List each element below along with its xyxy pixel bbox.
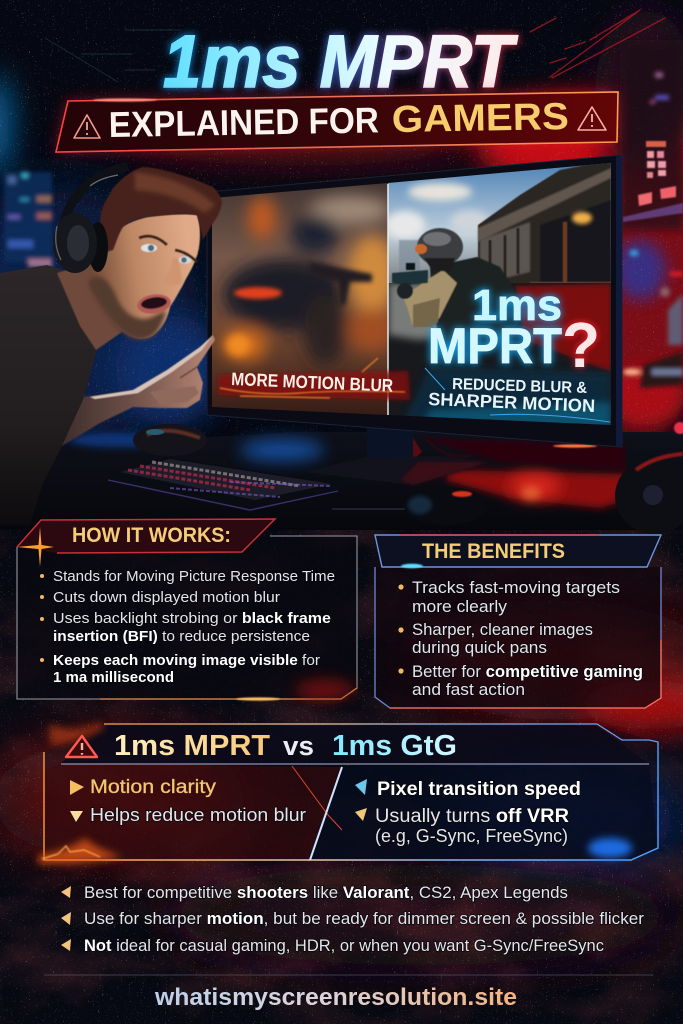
label: 1ms MPRT?: MPRT [428,318,562,374]
list: recommendations: Not ideal for casual gaming, HDR, or when you want G-Sync/FreeSync [84,936,604,955]
gamepad at right [615,422,683,534]
neck [57,262,122,350]
column: GtG: Usually turns off VRR [375,806,569,827]
list: how it works items: 1 ma millisecond [53,669,174,686]
list: benefits items: and fast action [412,680,525,699]
list: how it works items: Uses backlight strobing or black frame [53,610,331,627]
heading: 1ms MPRT vs 1ms GtG: vs [283,731,314,761]
mouth [136,292,172,316]
banner text: GAMERS [391,96,569,141]
banner text: EXPLAINED FOR [108,99,379,145]
divider [310,767,342,860]
screen left half: more motion blur [212,183,388,415]
list: recommendations: Best for competitive shooters like Valorant, CS2, Apex Legends [84,883,568,902]
icon: spark star [17,527,54,567]
mouse left [133,424,207,456]
column: GtG: (e.g, G-Sync, FreeSync) [375,826,568,846]
arm and hand [60,335,215,447]
soldier [392,228,518,345]
label: 1ms MPRT?: 1ms [472,281,562,330]
heading: the benefits: THE BENEFITS [422,540,565,563]
desk [0,432,683,530]
panel: how it works [17,519,357,701]
building [476,163,611,283]
banner text [108,96,569,146]
list: how it works items [40,568,335,686]
list: benefits items: during quick pans [412,638,547,657]
list: benefits items: Sharper, cleaner images [412,620,593,639]
city lights right [620,40,683,388]
column: GtG: Pixel transition speed [377,779,581,800]
icon: arrow [70,780,84,795]
label: more motion blur: MORE MOTION BLUR [231,369,394,396]
panel: the benefits [375,535,661,708]
label: 1ms MPRT?: MPRT [428,318,562,374]
monitor bezel [207,155,622,447]
heading: 1ms MPRT vs 1ms GtG: 1ms MPRT [114,730,270,762]
shirt [0,265,97,525]
nose [160,258,182,286]
city lights left [4,172,52,267]
label: 1ms MPRT?: ? [562,309,600,381]
monitor stand [303,425,490,485]
column: GtG [355,779,581,846]
footer divider [44,974,653,976]
label: 1ms MPRT? [428,281,600,381]
keyboard [108,457,338,512]
gamer pointing at the monitor [0,166,222,525]
icon: warning triangle left [74,115,100,138]
label: 1ms MPRT?: 1ms [472,281,562,330]
label: reduced blur and sharper motion [425,368,610,422]
panel: 1ms MPRT vs 1ms GtG [38,722,658,864]
mouse right [404,487,488,525]
column: MPRT: Helps reduce motion blur [90,805,306,825]
list: how it works items: Keeps each moving image visible for [53,652,320,669]
label: reduced blur and sharper motion: REDUCED BLUR & [452,376,588,397]
icon: arrow [355,808,367,821]
sparks and light streaks [45,10,665,82]
heading: 1ms MPRT vs 1ms GtG: 1ms GtG [332,730,457,762]
list: recommendations: Use for sharper motion, but be ready for dimmer screen & possible flicker [84,909,644,928]
headphones [53,166,128,273]
label: 1ms MPRT?: ? [562,309,600,381]
title: 1ms MPRT [163,20,518,103]
sparks right [588,838,632,858]
heading: how it works: HOW IT WORKS: [72,524,231,547]
flames left [38,722,122,864]
label: more motion blur [218,358,410,400]
column: MPRT [70,777,306,825]
screen divider [387,184,389,415]
hair [100,167,222,253]
list: benefits items: more clearly [412,597,507,616]
eyes [139,236,197,264]
heading: 1ms MPRT vs 1ms GtG [114,730,457,762]
list: benefits items [398,578,643,699]
list: how it works items: Stands for Moving Picture Response Time [53,568,335,585]
footer url: whatismyscreenresolution.site [154,984,517,1011]
label: reduced blur and sharper motion: SHARPER MOTION [428,389,596,416]
icon: warning triangle right [578,107,606,130]
icon: arrow [355,779,367,795]
icon: bullet arrows [61,886,71,951]
list: benefits items: Tracks fast-moving targets [412,578,620,597]
monitor [205,155,622,485]
icon: warning triangle [66,736,97,757]
list: how it works items: insertion (BFI) to reduce persistence [53,628,310,645]
list: benefits items: Better for competitive gaming [412,662,643,681]
face [88,214,200,340]
subtitle banner [56,92,618,152]
list: recommendations [61,883,644,955]
list: how it works items: Cuts down displayed motion blur [53,589,280,606]
column: MPRT: Motion clarity [90,777,217,798]
screen right half: reduced blur [385,160,613,430]
icon: arrow [70,811,83,822]
title: 1ms MPRT [163,20,518,103]
